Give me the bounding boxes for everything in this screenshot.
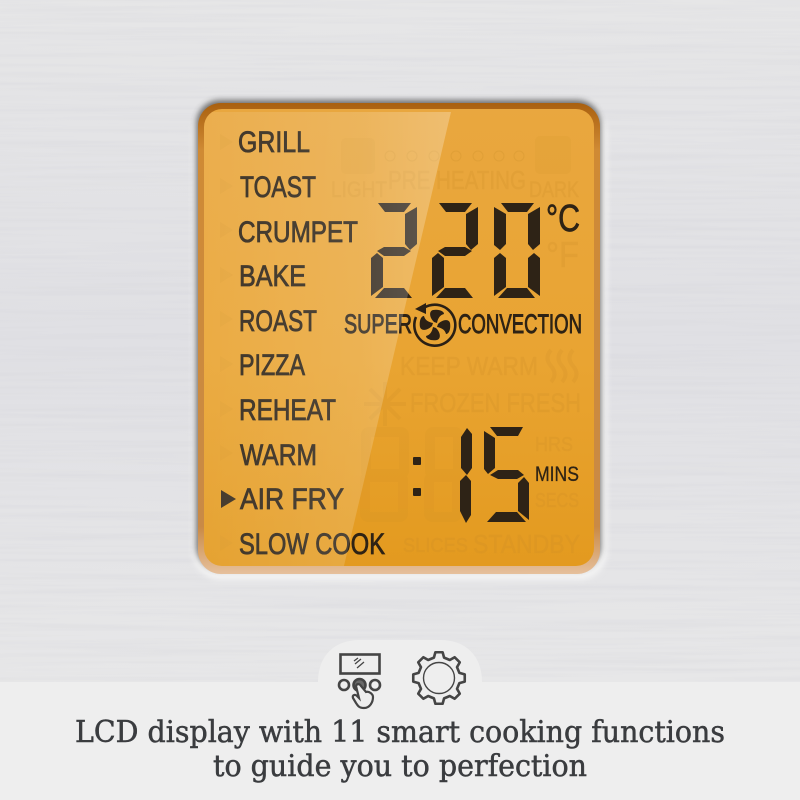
function menu list: TOAST xyxy=(240,171,316,204)
function menu list xyxy=(238,126,385,561)
glass reflection xyxy=(200,112,451,570)
caption band xyxy=(0,640,800,800)
inactive LCD segments xyxy=(220,134,581,559)
icon: touch control panel xyxy=(339,654,380,708)
function menu list: WARM xyxy=(240,439,317,472)
label: super convection: SUPER xyxy=(344,309,412,339)
inactive LCD segments: STANDBY xyxy=(473,529,580,559)
label: super convection xyxy=(344,309,582,339)
icon: settings gear xyxy=(413,652,465,704)
inactive LCD segments: °F xyxy=(546,234,579,275)
inactive LCD segments: DARK xyxy=(529,177,579,202)
function menu list: REHEAT xyxy=(239,394,336,427)
inactive LCD segments: HRS xyxy=(535,434,573,456)
degrees celsius unit: °C xyxy=(546,198,580,240)
selection arrow: air fry xyxy=(221,490,236,508)
inactive LCD segments: KEEP WARM xyxy=(400,351,538,381)
function menu list: ROAST xyxy=(239,305,317,338)
function menu list: AIR FRY xyxy=(240,483,344,516)
minutes unit: MINS xyxy=(535,463,579,486)
inactive LCD segments: PRE HEATING xyxy=(388,165,526,195)
time readout: 0:15 xyxy=(413,427,529,550)
inactive LCD segments: SLICES xyxy=(403,535,468,557)
label: super convection: CONVECTION xyxy=(458,309,582,339)
function menu list: BAKE xyxy=(239,260,306,293)
caption text: to guide you to perfection xyxy=(213,749,587,783)
inactive LCD segments: SECS xyxy=(535,490,579,512)
caption text: LCD display with 11 smart cooking functions xyxy=(75,715,725,749)
function menu list: CRUMPET xyxy=(238,216,358,249)
function menu list: PIZZA xyxy=(239,349,305,382)
inactive LCD segments: FROZEN FRESH xyxy=(410,388,581,418)
display bezel xyxy=(193,100,607,580)
icon: convection fan xyxy=(414,303,455,346)
function menu list: GRILL xyxy=(238,126,310,159)
function menu list: SLOW COOK xyxy=(239,528,385,561)
panel: LCD display xyxy=(193,100,607,580)
inactive LCD segments: LIGHT xyxy=(331,177,387,202)
caption text xyxy=(75,715,725,783)
